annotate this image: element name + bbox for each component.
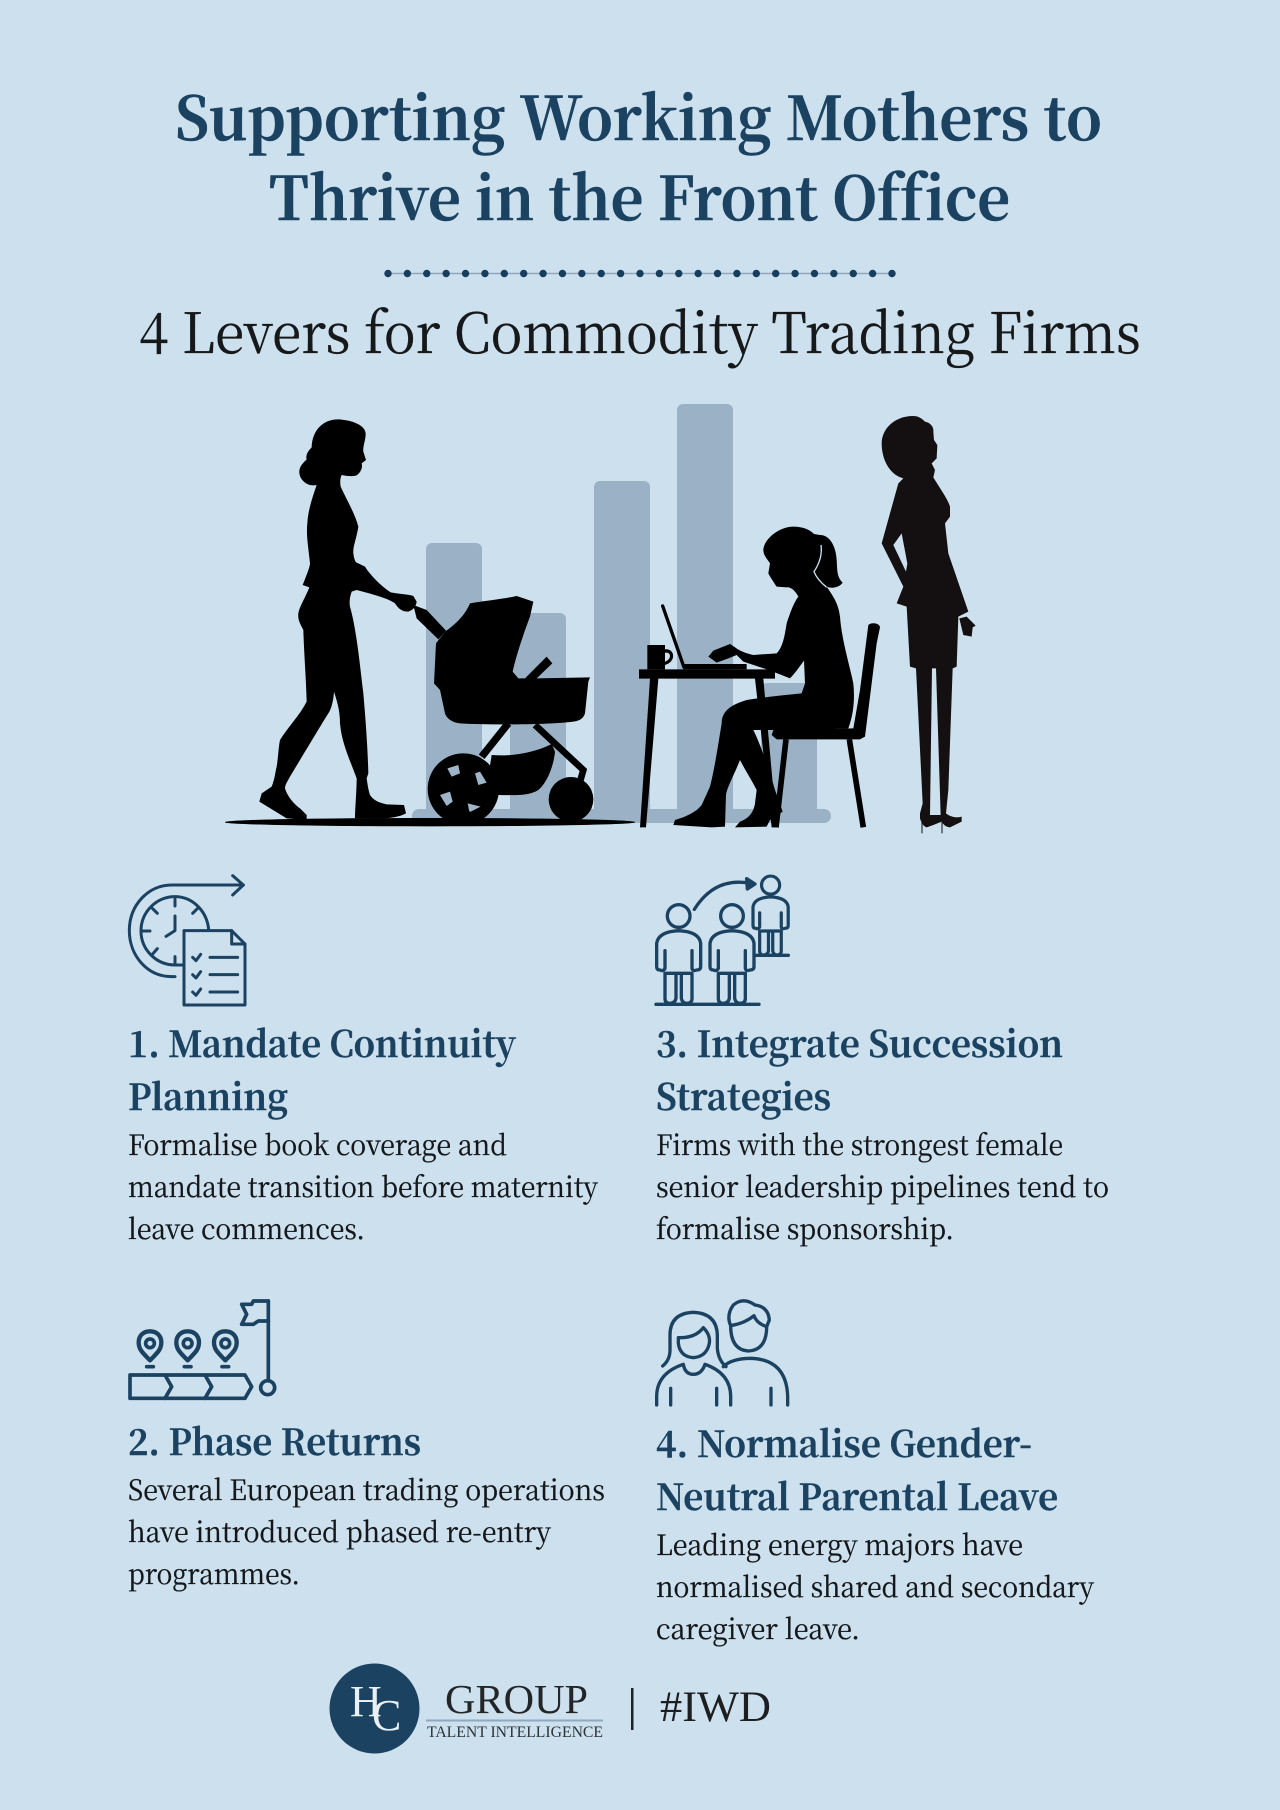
body text: Formalise book coverage and bbox=[128, 1124, 507, 1164]
icon: clock, arrow and checklist bbox=[129, 876, 245, 1005]
panel: lever 2 bbox=[128, 1301, 605, 1593]
divider bbox=[631, 1688, 634, 1730]
icon: two parents bbox=[657, 1301, 788, 1405]
logo wordmark: GROUP bbox=[445, 1676, 588, 1722]
title: Supporting Working Mothers to bbox=[175, 72, 1102, 158]
body text bbox=[128, 1469, 605, 1593]
illustration: working mothers and rising bars bbox=[225, 404, 976, 833]
woman bbox=[673, 527, 854, 827]
ground bbox=[225, 818, 635, 826]
pram wheels bbox=[428, 753, 499, 825]
silhouette: woman pushing pram bbox=[225, 419, 635, 826]
desk bbox=[639, 669, 777, 827]
heading: 2. Phase Returns bbox=[128, 1415, 421, 1466]
pram frame bbox=[482, 723, 508, 757]
heading: Strategies bbox=[656, 1070, 831, 1121]
heading: Planning bbox=[128, 1070, 288, 1121]
body text: caregiver leave. bbox=[656, 1608, 860, 1648]
body text: Leading energy majors have bbox=[656, 1524, 1023, 1564]
icon: milestones and flag bbox=[130, 1301, 275, 1398]
hashtag: #IWD bbox=[660, 1684, 771, 1731]
heading bbox=[656, 1417, 1058, 1521]
title bbox=[175, 72, 1102, 238]
subtitle: 4 Levers for Commodity Trading Firms bbox=[139, 290, 1141, 370]
heading: Neutral Parental Leave bbox=[656, 1470, 1058, 1521]
body text bbox=[656, 1124, 1109, 1248]
heading: 3. Integrate Succession bbox=[656, 1017, 1063, 1068]
body text: formalise sponsorship. bbox=[656, 1208, 954, 1248]
pram body bbox=[434, 596, 590, 724]
body text: mandate transition before maternity bbox=[128, 1166, 599, 1206]
body text: Firms with the strongest female bbox=[656, 1124, 1063, 1164]
body text: normalised shared and secondary bbox=[656, 1566, 1095, 1606]
panel: lever 3 bbox=[656, 876, 1109, 1248]
body text bbox=[656, 1524, 1095, 1648]
body text: leave commences. bbox=[128, 1208, 365, 1248]
logo wordmark bbox=[426, 1676, 603, 1741]
chair bbox=[772, 623, 880, 739]
laptop bbox=[663, 606, 684, 667]
footer: HC Group logo and hashtag bbox=[330, 1664, 771, 1754]
logo badge: H bbox=[350, 1677, 382, 1726]
ground shadow bbox=[225, 818, 635, 826]
mug bbox=[647, 645, 673, 669]
heading: 4. Normalise Gender- bbox=[656, 1417, 1032, 1468]
bar chart backdrop bbox=[412, 404, 831, 823]
body text bbox=[128, 1124, 599, 1248]
panel: lever 4 bbox=[656, 1301, 1095, 1648]
icon: succession people bbox=[656, 876, 788, 1004]
heading bbox=[128, 1017, 516, 1121]
body text: Several European trading operations bbox=[128, 1469, 605, 1509]
heading: 1. Mandate Continuity bbox=[128, 1017, 516, 1068]
body text: programmes. bbox=[128, 1553, 300, 1593]
silhouette: standing woman bbox=[882, 416, 976, 833]
panel: lever 1 bbox=[128, 876, 599, 1248]
ponytail parting bbox=[814, 545, 827, 587]
title: Thrive in the Front Office bbox=[269, 152, 1010, 238]
logo badge bbox=[330, 1664, 420, 1754]
heading bbox=[656, 1017, 1063, 1121]
dotted divider bbox=[388, 272, 892, 274]
logo badge: C bbox=[372, 1691, 401, 1740]
body text: have introduced phased re-entry bbox=[128, 1511, 552, 1551]
body text: senior leadership pipelines tend to bbox=[656, 1166, 1109, 1206]
logo wordmark: TALENT INTELLIGENCE bbox=[427, 1724, 603, 1741]
silhouette: seated woman at desk bbox=[639, 527, 880, 827]
pram handle bbox=[413, 605, 446, 639]
